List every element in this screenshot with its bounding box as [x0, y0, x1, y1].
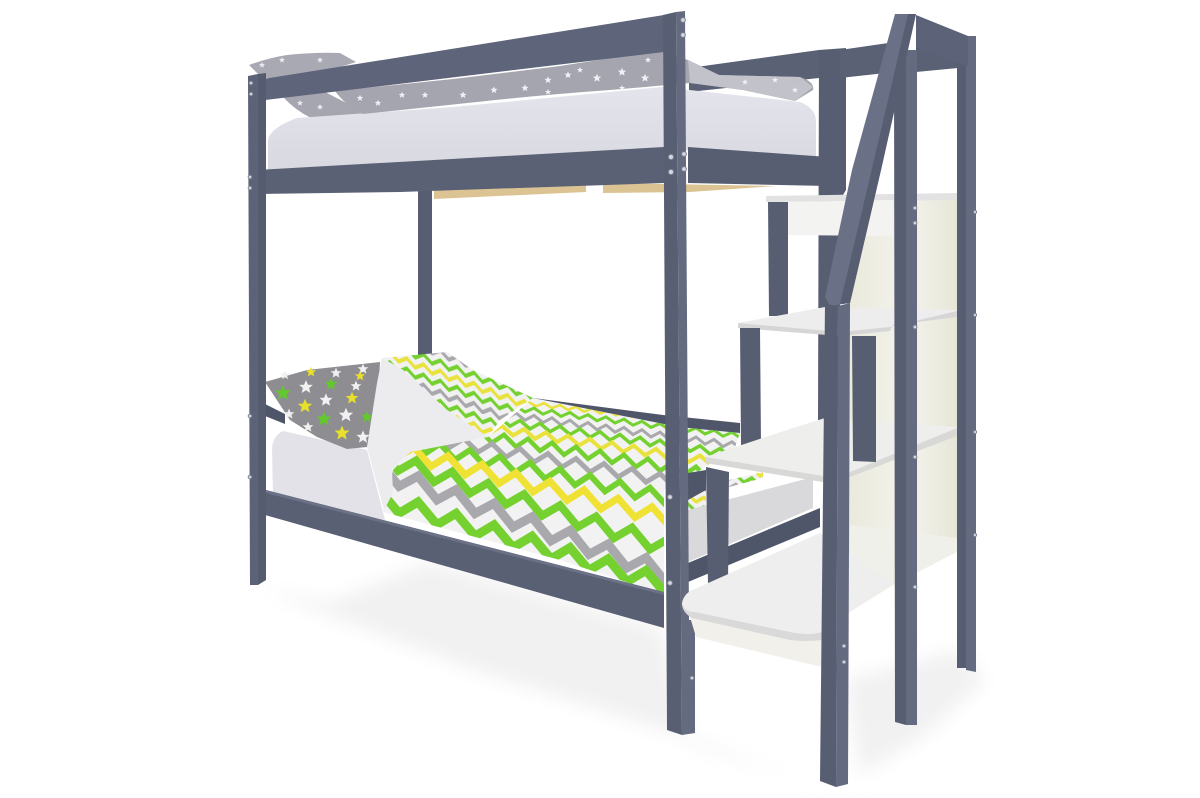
lower pillow with coloured stars	[265, 362, 380, 449]
duvet with chevron pattern	[367, 352, 763, 592]
staircase back panel	[848, 200, 957, 613]
upper mattress	[268, 87, 816, 172]
back post of staircase	[957, 36, 976, 672]
guard rail at stair top	[916, 15, 968, 66]
upper pillow	[249, 53, 366, 118]
middle stair post	[894, 50, 917, 725]
stair leg 4	[706, 467, 729, 587]
bolts	[248, 18, 977, 680]
upper bunk side rail	[257, 147, 828, 194]
front corner post	[663, 11, 695, 735]
top guard rail	[257, 15, 664, 101]
lower mattress	[272, 431, 386, 524]
lower bed rail right side	[688, 470, 820, 582]
upper blanket with stars	[335, 50, 813, 114]
mattress under staircase	[688, 477, 813, 562]
third step	[705, 418, 957, 482]
stair leg 2	[740, 328, 761, 445]
white reverse side of the folded duvet	[367, 358, 488, 510]
lower bed front rail	[258, 488, 664, 628]
front stair post	[820, 303, 850, 787]
diagonal handrail	[825, 14, 916, 306]
floor shadow	[262, 562, 985, 790]
illustration: grey bunk bed with side staircase	[248, 11, 978, 787]
top step with drawer	[766, 193, 957, 236]
bottom step	[682, 533, 893, 641]
second step	[738, 307, 957, 336]
fourth shelf	[850, 525, 957, 585]
stair leg 3	[852, 336, 876, 462]
back frame of the bunk	[418, 38, 958, 420]
stair leg 1	[768, 202, 788, 316]
lower bed back rail	[265, 398, 740, 434]
lower panel under bottom step	[690, 617, 822, 667]
wooden slats under top bunk	[434, 183, 776, 199]
left corner post	[248, 73, 266, 585]
